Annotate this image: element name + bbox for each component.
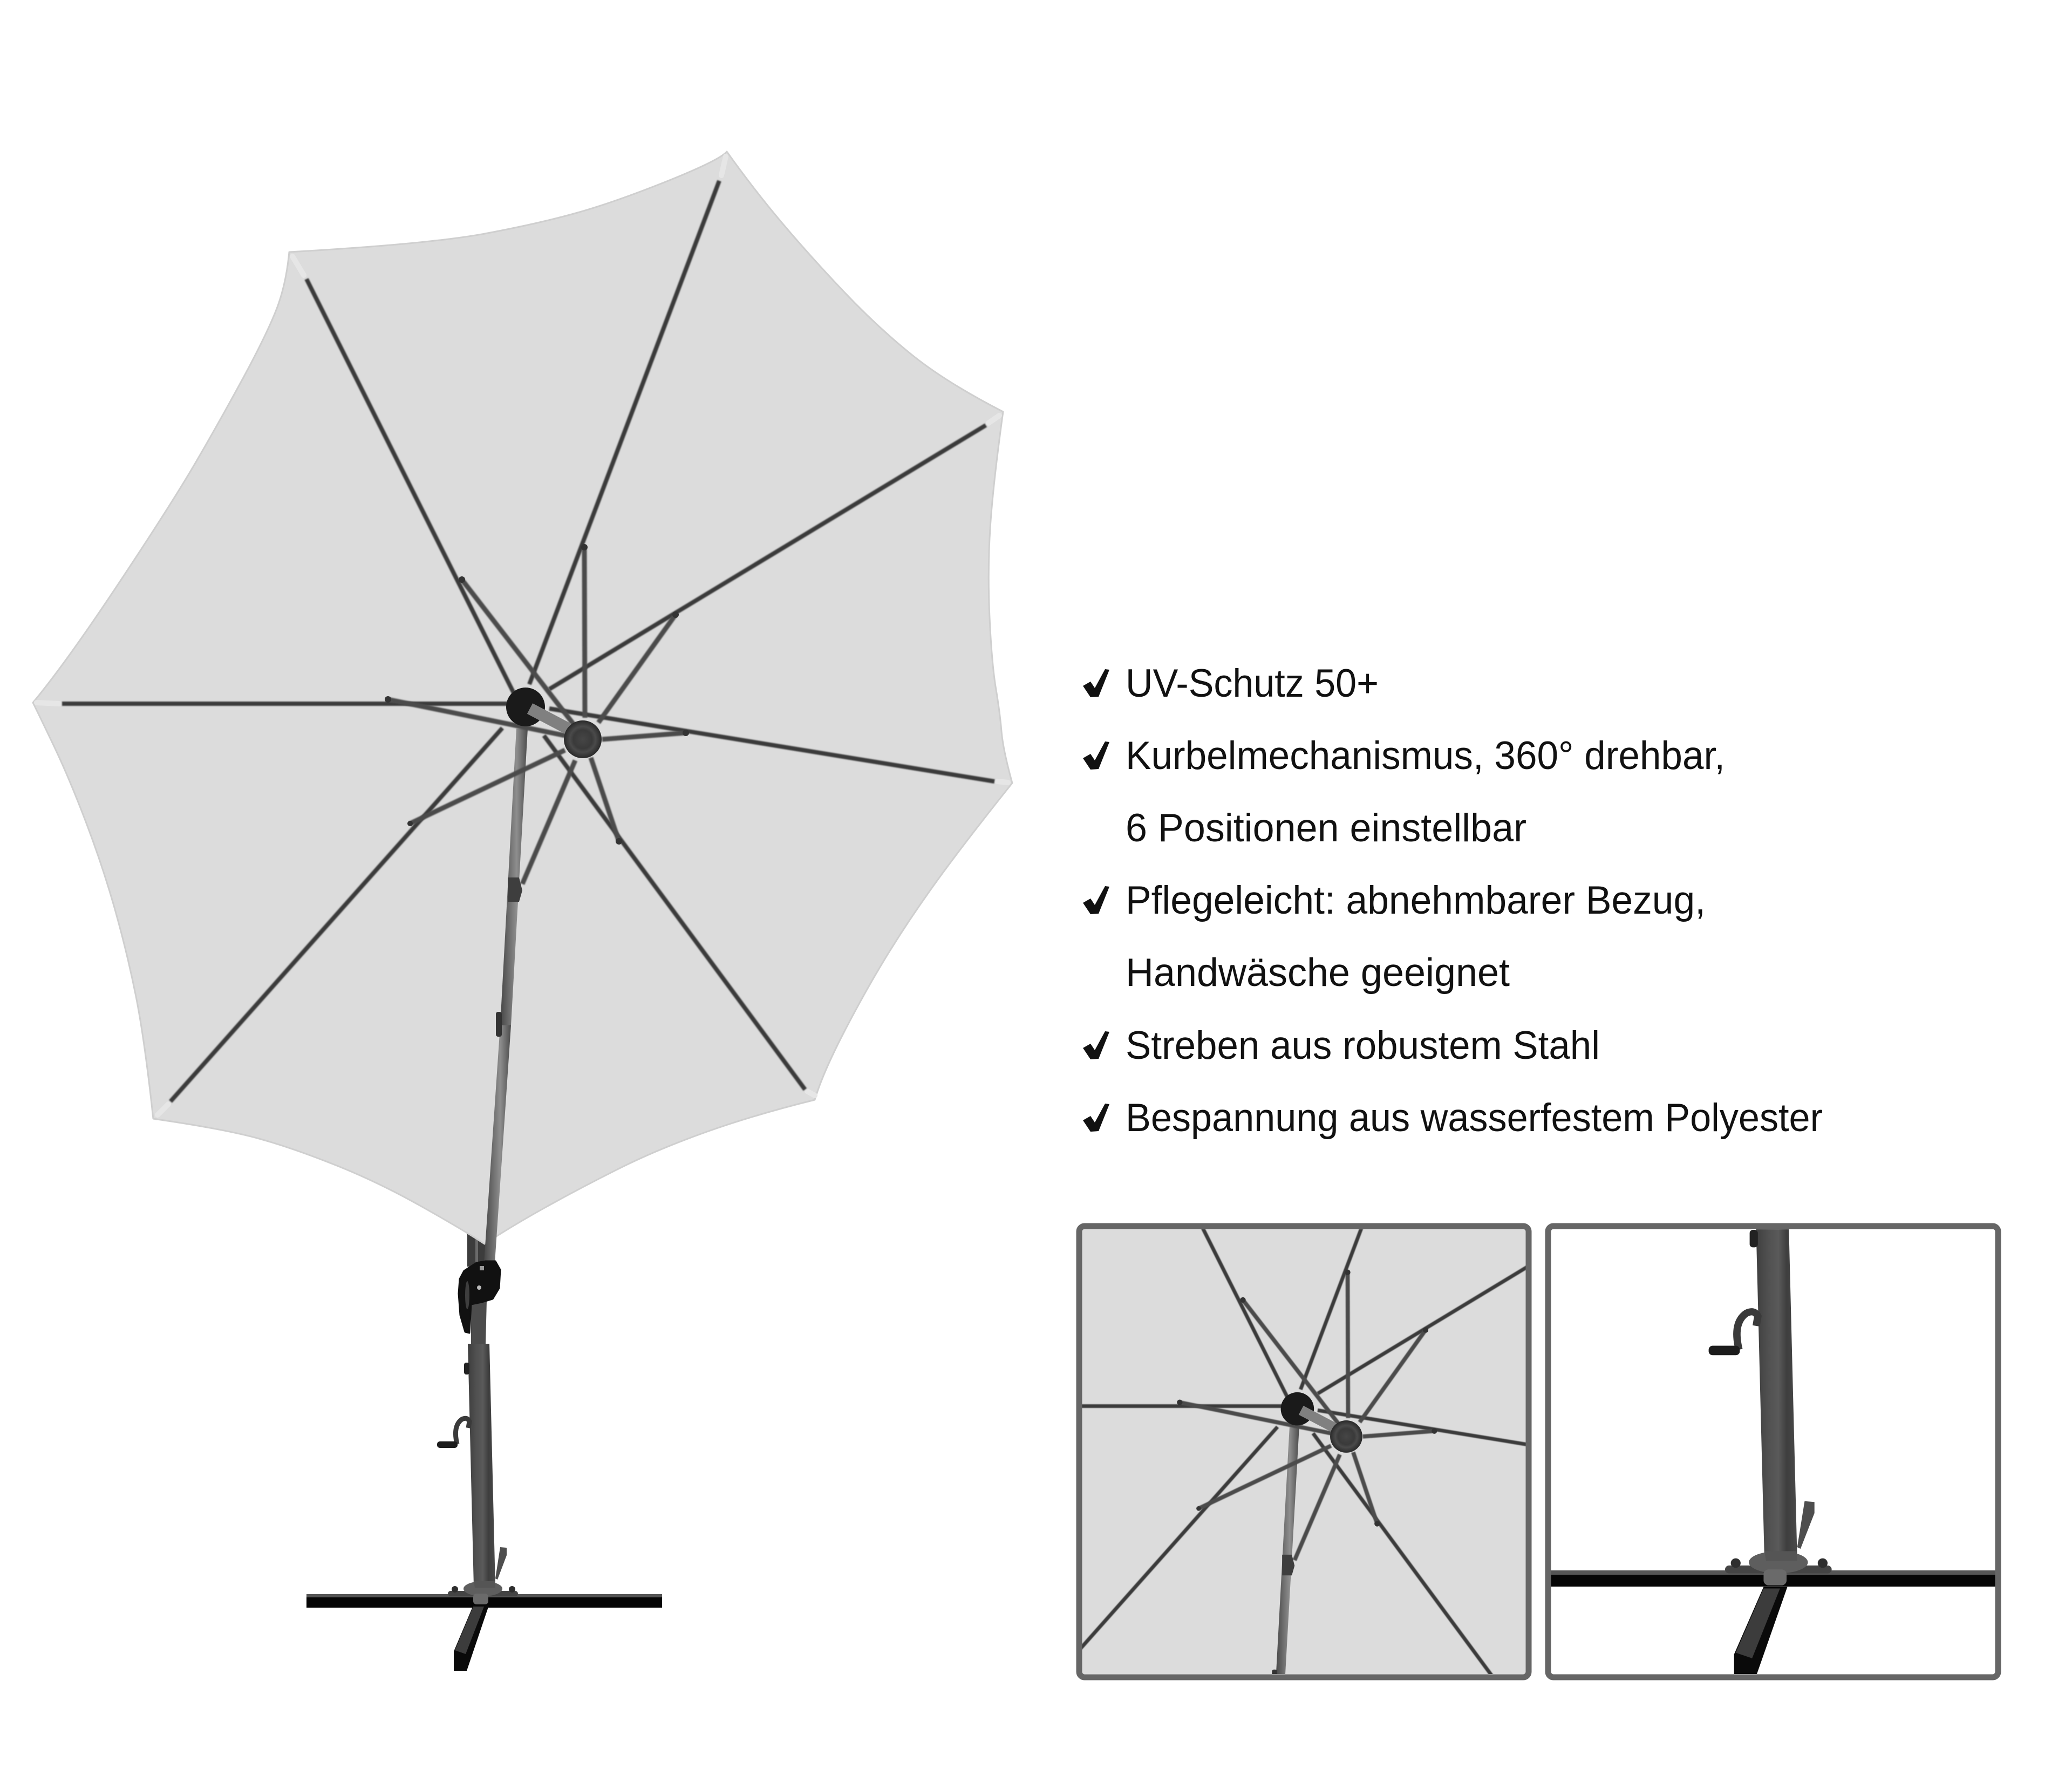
adjustment knob [464, 1363, 469, 1374]
umbrella product illustration [33, 152, 1012, 1671]
canopy [33, 152, 1012, 1244]
canopy frame [62, 181, 994, 1101]
crank handle [437, 1418, 469, 1448]
feature: UV-Schutz: UV-Schutz 50+ [1126, 662, 1379, 705]
base plate and collar [448, 1581, 518, 1604]
main mast [500, 729, 528, 1025]
lower knob [564, 720, 602, 758]
feature: Pflegeleicht [1083, 879, 1706, 995]
lower mast [468, 1344, 495, 1587]
strut hinges [385, 544, 689, 845]
feature: Kurbelmechanismus: Kurbelmechanismus, 360° drehbar, [1126, 734, 1725, 778]
canopy tip reinforcements [37, 156, 1008, 1115]
feature: Streben: Streben aus robustem Stahl [1126, 1024, 1600, 1067]
stand [437, 1261, 518, 1671]
panel: stand detail [1545, 1223, 2001, 1680]
mast bracket [508, 877, 522, 902]
feature: Pflegeleicht: Handwäsche geeignet [1126, 951, 1510, 995]
canopy hub [506, 688, 545, 726]
lower mast inside canopy [484, 1025, 511, 1263]
feature: Kurbelmechanismus: 6 Positionen einstellbar [1126, 806, 1526, 850]
panel: canopy detail [1076, 1223, 1531, 1680]
base cross bar [306, 1594, 662, 1608]
mast clip [496, 1012, 502, 1037]
arm between hub and knob [530, 709, 570, 730]
rear support tube [467, 1228, 489, 1267]
tilt housing [459, 1261, 500, 1333]
upper mast [471, 1301, 487, 1344]
canopy ribs [62, 181, 994, 1101]
feature list [1083, 662, 1823, 1140]
front base leg [454, 1605, 489, 1671]
feature: Pflegeleicht: Pflegeleicht: abnehmbarer Bezug, [1126, 879, 1706, 922]
feature: Bespannung: Bespannung aus wasserfestem Polyester [1126, 1096, 1823, 1140]
support struts [388, 547, 686, 884]
rear base leg [495, 1547, 507, 1580]
feature: Kurbelmechanismus [1083, 734, 1725, 850]
